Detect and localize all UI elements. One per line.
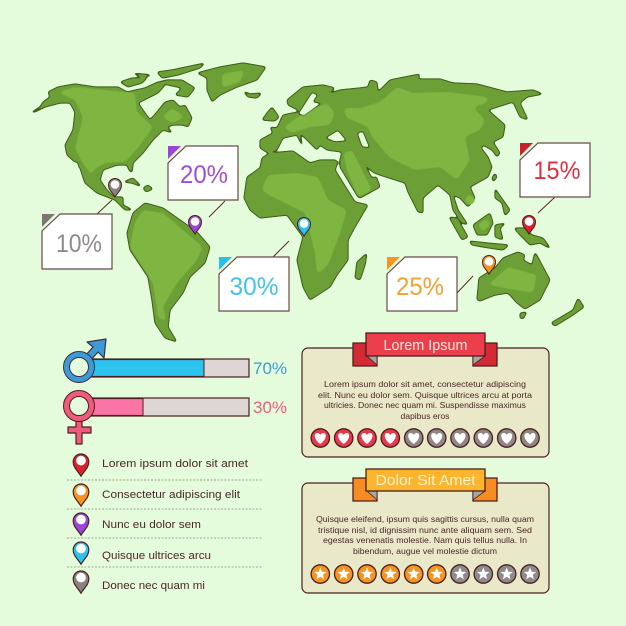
panel text: dapibus eros [400,411,450,421]
Africa [244,151,368,300]
legend item 5: Donec nec quam mi [102,580,205,592]
legend item 4 [73,542,211,564]
male percent: 70% [253,359,287,378]
map pin: grey [108,178,122,197]
panel text: bibendum, augue vel molestie dictum [353,546,497,556]
panel text: tristique nisl, id dignissim nunc ante aliquam sem. Sed [318,525,532,535]
legend [67,454,263,593]
legend item 1 [73,454,248,476]
lighter interior shading [57,70,538,323]
icon: female symbol [64,390,94,444]
Iceland and UK [243,91,279,121]
ribbon: Dolor Sit Amet [353,469,497,501]
legend item 3: Nunc eu dolor sem [102,519,201,531]
panel: Lorem Ipsum [302,333,549,457]
female percent: 30% [253,398,287,417]
map pin: red [522,216,536,234]
Caribbean islands [123,178,153,192]
female bar [85,398,249,416]
ribbon: Lorem Ipsum: Lorem Ipsum [384,337,468,354]
Greenland [197,63,266,102]
map pin: purple [188,216,202,234]
Arctic islands [120,63,205,97]
map pin: blue [298,218,310,236]
panel text [318,379,532,421]
legend item 3 [73,513,201,535]
callout: 15%: 15% [534,157,580,185]
North America [30,82,192,210]
panel text: elit. Nunc eu dolor sem. Quisque ultrices arcu at porta [318,390,532,400]
callout: 25% [387,257,473,311]
Australia [477,252,550,319]
legend item 5 [73,571,205,593]
Madagascar [355,253,367,280]
map pin: orange [482,256,496,274]
legend item 4: Quisque ultrices arcu [102,550,211,562]
callout: 30%: 30% [230,273,278,301]
ribbon: Dolor Sit Amet: Dolor Sit Amet [376,472,476,489]
South America [127,203,210,342]
ribbon: Lorem Ipsum [353,333,497,366]
New Zealand [551,298,584,326]
world map [30,63,584,342]
callout: 25%: 25% [396,273,444,301]
panel text: Quisque eleifend, ipsum quis sagittis cursus, nulla quam [316,514,534,524]
legend item 1: Lorem ipsum dolor sit amet [102,458,248,470]
Southeast Asia islands [449,173,551,250]
hearts rating [311,429,539,447]
legend item 2: Consectetur adipiscing elit [102,489,240,501]
stars rating [311,565,539,583]
land masses [30,63,584,342]
callout: 20% [168,146,238,217]
legend item 2 [73,484,240,506]
callout: 20%: 20% [180,161,228,189]
panel text: ultricies. Donec nec quam mi. Suspendisse maximus [324,400,526,410]
callout: 15% [520,143,590,213]
callout: 10% [42,200,112,269]
panel: Dolor Sit Amet [302,469,549,593]
male bar [85,359,249,377]
callout: 10%: 10% [56,230,102,258]
icon: male symbol [64,339,106,382]
panel text: Lorem ipsum dolor sit amet, consectetur adipiscing [324,379,526,389]
panel text: egestas venenatis molestie. Nam quis tellus nulla. In [323,535,527,545]
Eurasia [260,74,543,225]
panel text [316,514,534,556]
callout: 30% [219,241,289,311]
